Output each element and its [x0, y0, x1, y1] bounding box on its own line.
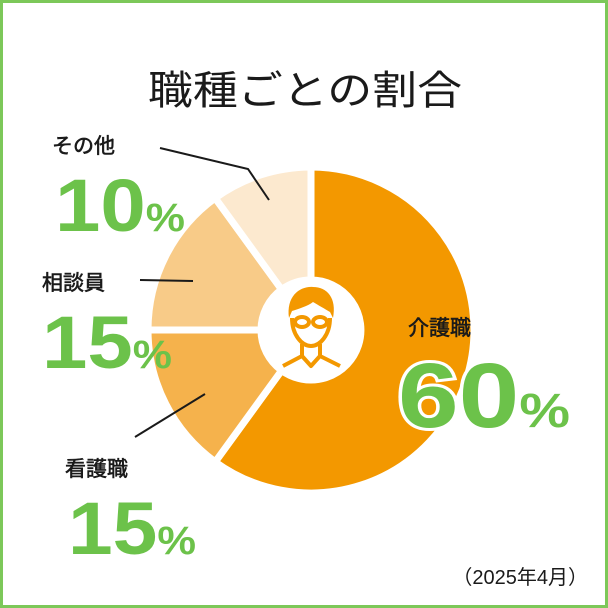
label: その他 10%: 10% — [55, 164, 185, 247]
label: 介護職 60%: 介護職 — [408, 317, 471, 340]
title: 職種ごとの割合 — [148, 69, 462, 113]
label: 介護職 60%: 60 % — [398, 345, 570, 447]
icon: person with glasses — [264, 283, 358, 377]
label: 看護職 15%: 看護職 — [65, 458, 128, 481]
label: 相談員 15%: 15% — [42, 301, 172, 384]
segment: 相談員 15% — [148, 198, 282, 330]
label: 看護職 15%: 15% — [68, 487, 196, 570]
donut chart — [148, 167, 474, 493]
segment: 介護職 60% — [215, 167, 474, 493]
label: その他 10%: その他 — [52, 135, 115, 158]
segment: その他 10% — [215, 167, 311, 290]
label: 相談員 15%: 相談員 — [42, 272, 105, 295]
leader lines — [135, 148, 269, 437]
segment: 看護職 15% — [148, 330, 282, 462]
date note: （2025年4月） — [452, 566, 588, 589]
